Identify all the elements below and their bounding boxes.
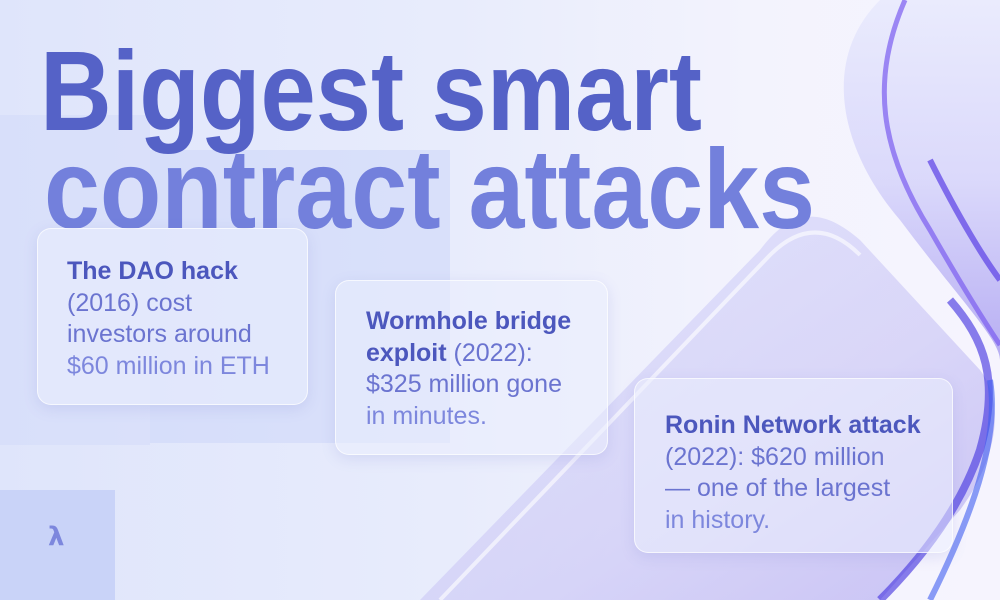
card: DAO hack — [37, 228, 308, 405]
title: Biggest smart — [40, 27, 702, 154]
card: Ronin: — one of the largest — [665, 474, 890, 502]
card: Ronin: in history. — [665, 506, 770, 534]
card: Wormhole: $325 million gone — [366, 370, 562, 398]
card: Ronin — [634, 378, 953, 553]
card: Wormhole: exploit (2022): — [366, 338, 533, 366]
background decorative squares — [0, 115, 150, 445]
card: Wormhole: Wormhole bridge — [366, 307, 571, 335]
card: DAO hack: investors around — [67, 320, 252, 348]
card: Wormhole — [335, 280, 608, 455]
card: Ronin: Ronin Network attack — [665, 411, 921, 439]
title — [40, 27, 815, 252]
card: DAO hack: The DAO hack — [67, 257, 238, 285]
card: Wormhole: in minutes. — [366, 402, 487, 430]
card: DAO hack: $60 million in ETH — [67, 352, 270, 380]
title: contract attacks — [44, 125, 815, 252]
card: DAO hack: (2016) cost — [67, 288, 192, 316]
logo: λ — [48, 522, 64, 552]
card: Ronin: (2022): $620 million — [665, 442, 885, 470]
